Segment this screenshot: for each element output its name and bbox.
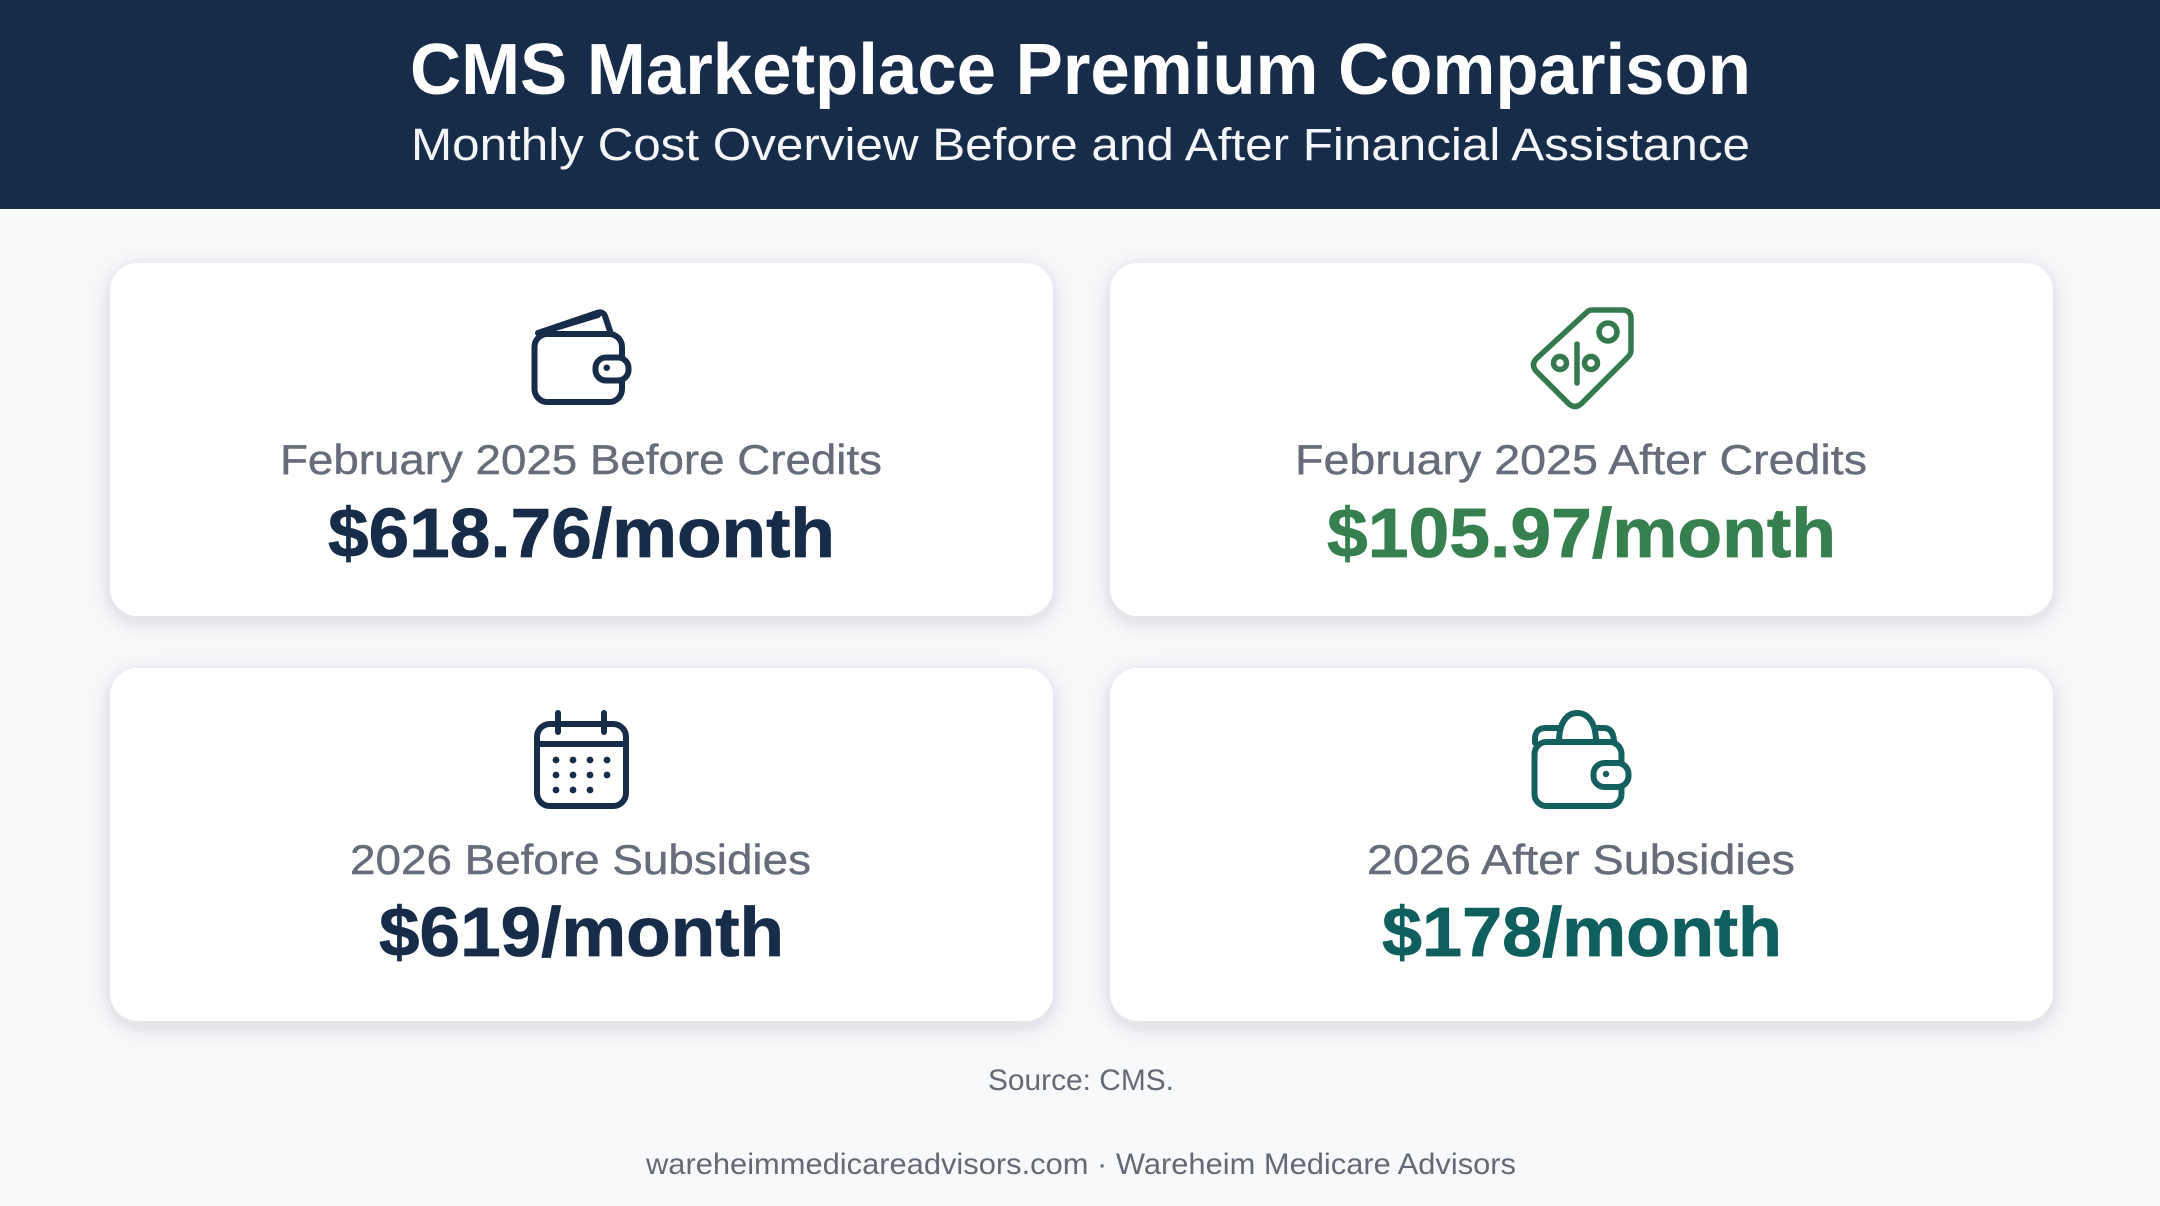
- label: 2026 After Subsidies: [1367, 836, 1795, 883]
- panel: February 2025 before credits: [110, 263, 1053, 616]
- icon: calendar: [537, 713, 626, 806]
- icon: percent price tag: [1534, 310, 1631, 406]
- title: CMS Marketplace Premium Comparison: [410, 30, 1751, 110]
- label: February 2025 Before Credits: [280, 436, 882, 483]
- value: $619/month: [379, 893, 784, 971]
- value: $618.76/month: [328, 494, 835, 572]
- value: $105.97/month: [1327, 494, 1836, 572]
- footer: wareheimmedicareadvisors.com · Wareheim Medicare Advisors: [645, 1148, 1516, 1181]
- header banner: [0, 0, 2160, 209]
- value: $178/month: [1382, 893, 1782, 971]
- source note: Source: CMS.: [988, 1064, 1174, 1097]
- label: February 2025 After Credits: [1295, 436, 1867, 483]
- icon: wallet: [534, 312, 628, 402]
- panel: February 2025 after credits: [1110, 263, 2053, 616]
- panel: 2026 before subsidies: [110, 668, 1053, 1021]
- label: 2026 Before Subsidies: [350, 836, 811, 883]
- panel: 2026 after subsidies: [1110, 668, 2053, 1021]
- subtitle: Monthly Cost Overview Before and After Financial Assistance: [411, 119, 1750, 170]
- icon: wallet with shopping bag: [1534, 713, 1628, 806]
